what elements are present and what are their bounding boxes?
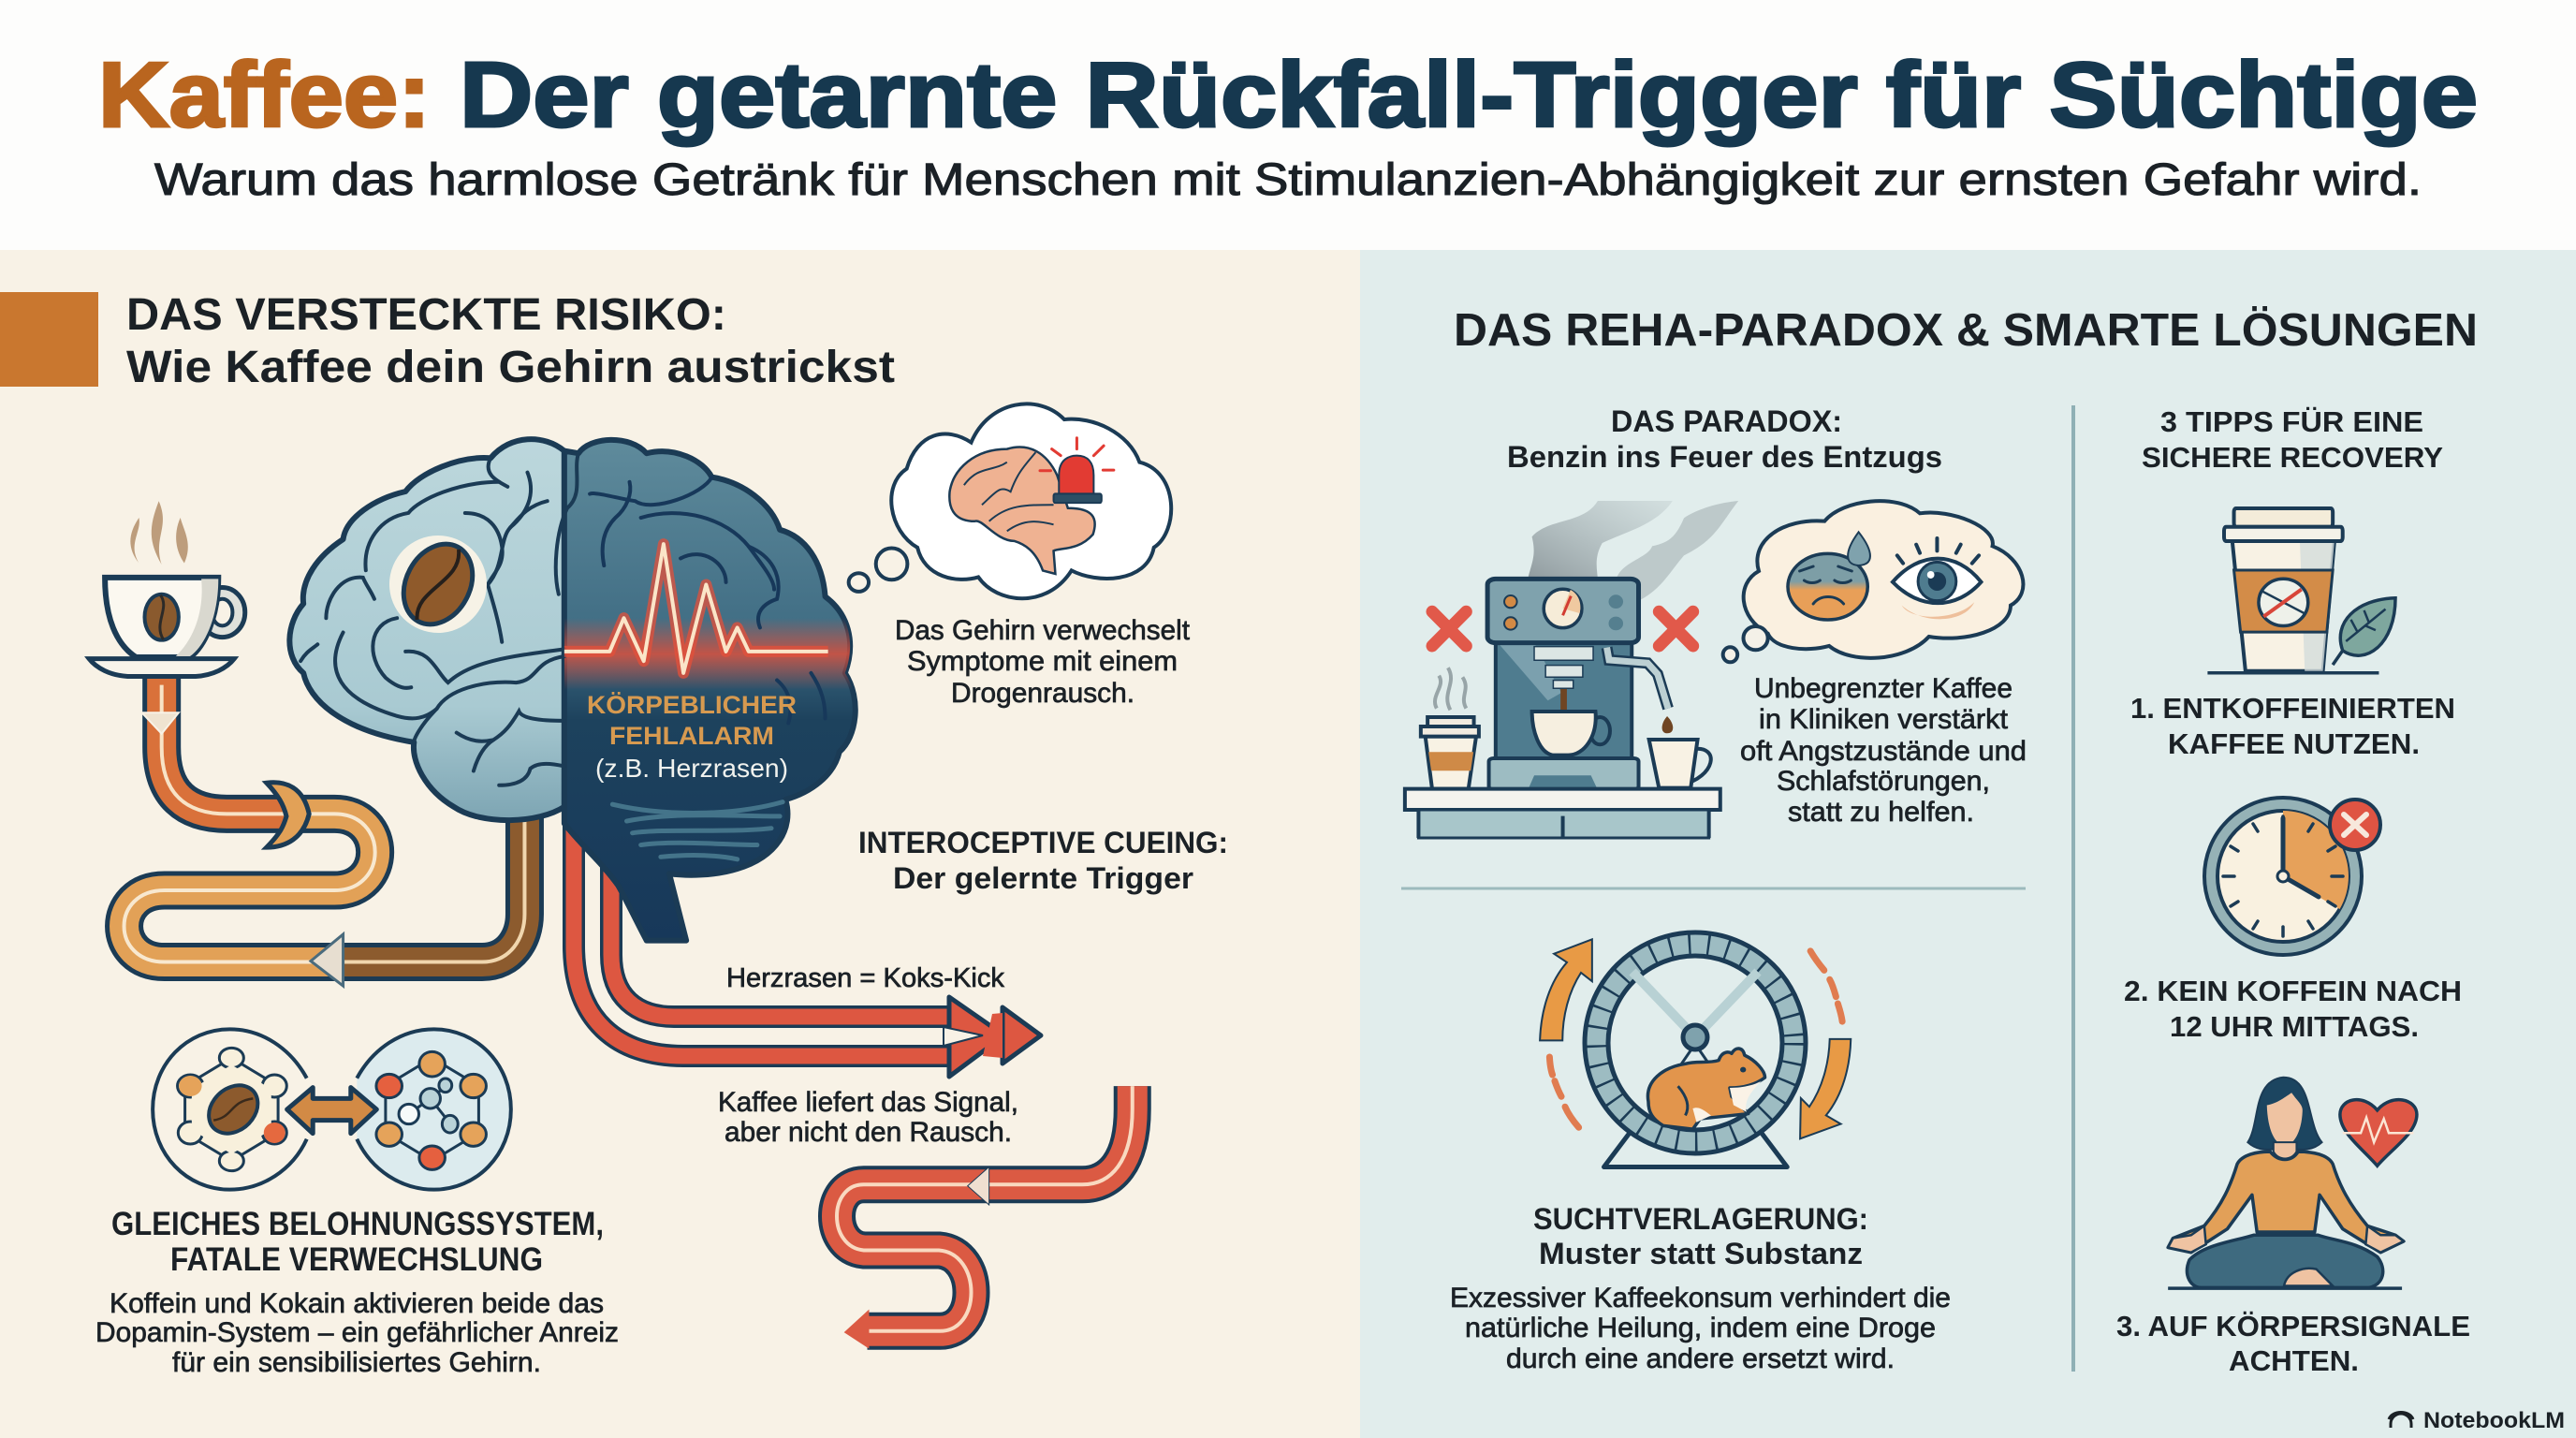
heading: hidden risk: Wie Kaffee dein Gehirn austrickst xyxy=(126,343,895,392)
header background xyxy=(0,0,2576,250)
text: tip 2: 2. KEIN KOFFEIN NACH xyxy=(2124,975,2462,1007)
arrow: orange pipe from cup to brain xyxy=(124,678,524,986)
heading: the paradox xyxy=(1507,404,1942,474)
text: caffeine and cocaine: Koffein und Kokain aktivieren beide das xyxy=(110,1288,604,1319)
heading: rehab paradox: DAS REHA-PARADOX & SMARTE LÖSUNGEN xyxy=(1454,305,2478,356)
arrow: red winding pipe xyxy=(837,1086,1133,1349)
text: tip 3 xyxy=(2116,1310,2470,1377)
text: coffee delivers the signal xyxy=(718,1087,1018,1148)
icon: coffee cup xyxy=(89,501,245,676)
text: caffeine and cocaine: für ein sensibilisiertes Gehirn. xyxy=(172,1347,541,1378)
right hemisphere xyxy=(564,440,856,941)
heading: addiction shift: SUCHTVERLAGERUNG: xyxy=(1533,1202,1868,1236)
heading: addiction shift xyxy=(1533,1202,1868,1270)
text: unlimited coffee: Unbegrenzter Kaffee xyxy=(1754,673,2012,704)
text: excessive coffee consumption: Exzessiver Kaffeekonsum verhindert die xyxy=(1450,1283,1951,1313)
text: brain confuses symptoms: Symptome mit einem xyxy=(907,646,1178,677)
heading: three tips xyxy=(2142,405,2443,474)
heading: same reward system: FATALE VERWECHSLUNG xyxy=(170,1241,543,1278)
text: tip 2: 12 UHR MITTAGS. xyxy=(2170,1010,2419,1043)
heading: hidden risk: DAS VERSTECKTE RISIKO: xyxy=(126,290,726,340)
heading: interoceptive cueing: Der gelernte Trigger xyxy=(893,861,1193,895)
heading: three tips: 3 TIPPS FÜR EINE xyxy=(2160,405,2423,438)
text: unlimited coffee: statt zu helfen. xyxy=(1788,797,1974,828)
text: unlimited coffee: Schlafstörungen, xyxy=(1777,766,1990,797)
title: Kaffee: xyxy=(98,43,431,146)
icon: meditating woman with heart xyxy=(2168,1078,2417,1288)
title: Der getarnte Rückfall-Trigger für Süchtige xyxy=(460,43,2478,146)
heading: hidden risk xyxy=(126,290,895,392)
heading: addiction shift: Muster statt Substanz xyxy=(1539,1237,1863,1270)
text: tip 3: 3. AUF KÖRPERSIGNALE xyxy=(2116,1310,2470,1343)
text: excessive coffee consumption: durch eine andere ersetzt wird. xyxy=(1506,1343,1895,1374)
icon: hamster wheel xyxy=(1540,932,1851,1167)
text: caffeine and cocaine: Dopamin-System – ein gefährlicher Anreiz xyxy=(95,1317,619,1348)
brain folds xyxy=(300,453,578,785)
text: heart racing equals coke kick: Herzrasen = Koks-Kick xyxy=(726,963,1004,993)
text: unlimited coffee: in Kliniken verstärkt xyxy=(1759,704,2009,735)
alarm glow xyxy=(564,618,865,690)
label: bodily false alarm: (z.B. Herzrasen) xyxy=(595,754,788,783)
icon: decaf cup with leaf xyxy=(2207,508,2395,673)
left hemisphere xyxy=(289,439,564,820)
label: bodily false alarm xyxy=(587,691,797,783)
subtitle: Warum das harmlose Getränk für Menschen mit Stimulanzien-Abhängigkeit zur ernsten Gefahr wird. xyxy=(154,155,2422,205)
panel: right section xyxy=(1401,305,2565,1433)
text: tip 3: ACHTEN. xyxy=(2229,1344,2359,1377)
heading: the paradox: Benzin ins Feuer des Entzugs xyxy=(1507,440,1942,474)
icon: brain with heartbeat alarm xyxy=(289,439,865,941)
heading: same reward system xyxy=(111,1206,604,1278)
text: coffee delivers the signal: Kaffee liefert das Signal, xyxy=(718,1087,1018,1118)
heading: the paradox: DAS PARADOX: xyxy=(1611,404,1842,438)
text: unlimited coffee xyxy=(1740,673,2027,828)
text: tip 1: 1. ENTKOFFEINIERTEN xyxy=(2130,692,2455,725)
heading: three tips: SICHERE RECOVERY xyxy=(2142,441,2443,474)
text: brain confuses symptoms: Das Gehirn verwechselt xyxy=(895,615,1191,646)
label: bodily false alarm: KÖRPEBLICHER xyxy=(587,691,797,719)
heading accent block xyxy=(0,292,98,387)
heartbeat line xyxy=(564,544,828,673)
callout: thought bubble with alarm brain xyxy=(849,404,1171,598)
text: brain confuses symptoms xyxy=(895,615,1191,709)
heading: same reward system: GLEICHES BELOHNUNGSSYSTEM, xyxy=(111,1206,604,1242)
text: brain confuses symptoms: Drogenrausch. xyxy=(951,678,1134,709)
panel: left background xyxy=(0,250,1360,1438)
text: tip 1 xyxy=(2130,692,2455,760)
icon: coffee bean in brain xyxy=(373,519,504,650)
text: caffeine and cocaine xyxy=(95,1288,619,1378)
text: tip 2 xyxy=(2124,975,2462,1043)
text: tip 1: KAFFEE NUTZEN. xyxy=(2168,727,2420,760)
icon: clock with prohibition badge xyxy=(2204,798,2380,955)
text: excessive coffee consumption: natürliche Heilung, indem eine Droge xyxy=(1465,1313,1936,1343)
text: unlimited coffee: oft Angstzustände und xyxy=(1740,736,2027,767)
heading: interoceptive cueing xyxy=(858,826,1228,895)
callout: anxiety and insomnia thought bubble xyxy=(1723,501,2023,662)
panel: left section xyxy=(0,290,1228,1378)
icon: shared reward system molecules xyxy=(153,1029,511,1190)
icon: espresso machine on counter xyxy=(1405,501,1738,838)
panel: right background xyxy=(1360,250,2576,1438)
text: excessive coffee consumption xyxy=(1450,1283,1951,1374)
heading: interoceptive cueing: INTEROCEPTIVE CUEING: xyxy=(858,826,1228,859)
arrow: red double pipe from brain xyxy=(574,824,1041,1077)
logo: NotebookLM: NotebookLM xyxy=(2423,1408,2565,1433)
label: bodily false alarm: FEHLALARM xyxy=(609,722,774,750)
cerebellum xyxy=(612,802,783,859)
text: coffee delivers the signal: aber nicht den Rausch. xyxy=(724,1117,1012,1148)
